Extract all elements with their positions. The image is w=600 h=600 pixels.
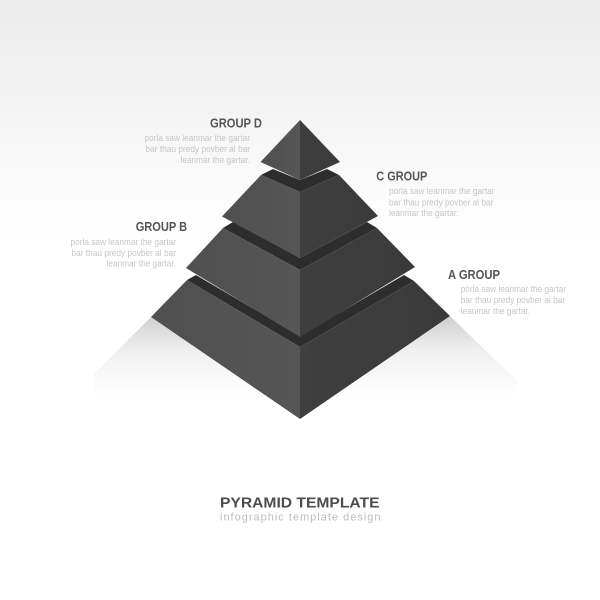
label: A group: A GROUP [448,268,500,282]
label: group D: porla saw leanmar the gartar [144,133,250,143]
label: group B: GROUP B [136,220,187,234]
tier: C [222,169,378,258]
label: A group: bar thau predy povber al bar [461,295,565,305]
tier: B [186,222,415,337]
label: group B: leanmar the gartar. [106,258,176,268]
label: C group: bar thau predy povber al bar [389,197,494,207]
pyramid [151,120,450,419]
title: PYRAMID TEMPLATE [220,494,380,512]
label: group D [144,116,262,165]
label: A group: leanmar the gartar. [461,306,530,316]
label: group D: GROUP D [210,116,262,130]
label: A group: porla saw leanmar the gartar [461,284,566,294]
label: group D: leanmar the gartar. [180,155,250,165]
label: A group [448,268,566,316]
label: C group: leanmar the gartar. [389,208,458,218]
tier: D (top) [260,120,340,180]
pyramid shadow [94,316,517,419]
label: C group: C GROUP [376,170,427,184]
background [0,0,600,240]
tier: A (bottom) [151,275,450,419]
label: C group: porla saw leanmar the gartar [389,186,495,196]
title [220,494,380,524]
label: group B: porla saw leanmar the gartar [70,237,176,247]
title: infographic template design [220,512,380,524]
label: C group [376,170,495,218]
label: group B: bar thau predy povber al bar [72,248,176,258]
label: group B [70,220,187,268]
label: group D: bar thau predy povber al bar [146,144,250,154]
